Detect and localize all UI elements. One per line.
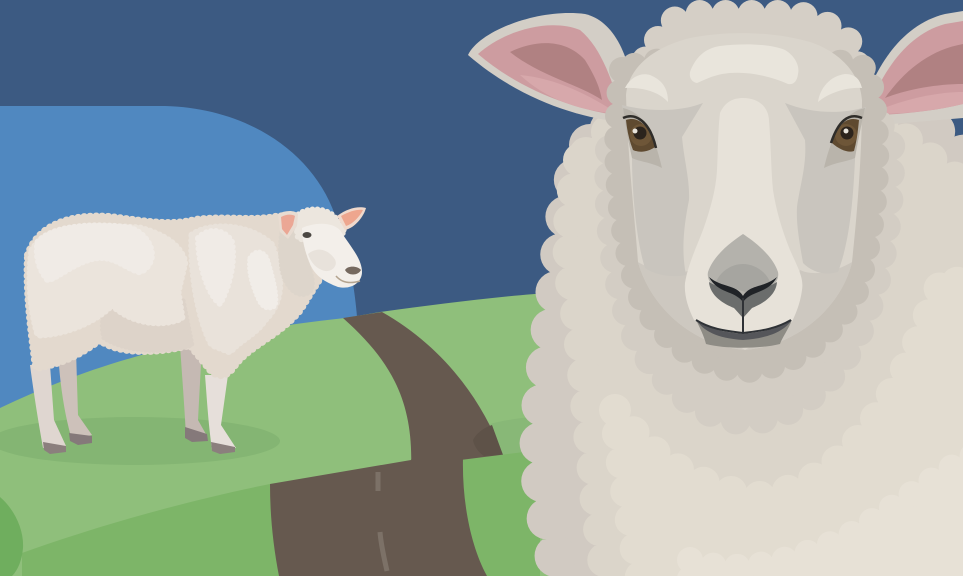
- small sheep: eye: [302, 232, 312, 238]
- large sheep: wide neck ruff: [609, 70, 890, 420]
- large sheep: [468, 11, 963, 576]
- large sheep: mouth line: [696, 298, 791, 333]
- large sheep: muzzle lobes: [696, 308, 790, 330]
- small sheep: fleece light layer: [30, 227, 185, 335]
- small sheep: belly shading: [102, 300, 192, 350]
- road: upper winding section: [343, 312, 503, 470]
- hill: back green slope: [0, 292, 560, 576]
- large sheep: top wool tuft: [640, 14, 858, 70]
- small sheep: [28, 207, 366, 454]
- large sheep: right brow highlight: [818, 74, 862, 102]
- small sheep: nose and mouth: [336, 267, 361, 283]
- large sheep: right ear: [858, 11, 963, 125]
- large sheep: nostril lines: [709, 277, 777, 302]
- small sheep: neck wool shade: [280, 228, 312, 295]
- small sheep: cheek shade: [308, 250, 336, 271]
- small sheep: far legs: [58, 345, 208, 445]
- large sheep: lip dark band: [696, 320, 792, 340]
- large sheep: left eye socket shade: [623, 108, 662, 168]
- large sheep: lower lip: [696, 320, 792, 348]
- road: lower wide section: [270, 458, 487, 576]
- large sheep: left eye: [623, 116, 656, 152]
- large sheep: mid fleece: [570, 120, 963, 576]
- small sheep: rump highlight: [37, 226, 151, 280]
- shadow: under small sheep: [0, 417, 280, 465]
- road: centre dashes: [378, 472, 387, 571]
- small sheep: face: [302, 224, 362, 288]
- large sheep: inner nose shade: [716, 264, 770, 292]
- large sheep: left brow highlight: [625, 74, 668, 102]
- large sheep: brightest chest fleece: [690, 450, 963, 576]
- large sheep: lower jaw shade: [638, 262, 852, 350]
- large sheep: outer fleece: [541, 100, 963, 576]
- small sheep: head wool: [295, 209, 345, 245]
- large sheep: under-nose dark band: [709, 282, 777, 318]
- small sheep: near ear: [278, 211, 298, 239]
- shadow: large sheep on road: [473, 425, 503, 456]
- hill: front green slope: [22, 450, 540, 576]
- large sheep: nose bridge and muzzle: [685, 98, 802, 332]
- large sheep: left ear: [468, 13, 634, 122]
- hill: dark green bush at lower left: [0, 497, 23, 576]
- small sheep: shoulder layer: [192, 227, 280, 352]
- large sheep: right eye socket shade: [824, 108, 865, 168]
- large sheep: face base: [626, 33, 862, 350]
- small sheep: fleece body: [28, 216, 325, 375]
- shadow: large sheep on back hill: [490, 416, 540, 458]
- small sheep: neck highlight: [249, 252, 276, 308]
- small sheep: near legs: [30, 365, 236, 454]
- large sheep: nose pad: [708, 234, 778, 304]
- large sheep: right eye: [831, 116, 862, 152]
- large sheep: forehead highlight: [690, 44, 798, 84]
- small sheep: shoulder highlight: [198, 231, 233, 304]
- large sheep: bright fleece: [615, 275, 963, 576]
- small sheep: far ear: [337, 207, 366, 230]
- large sheep: right cheek panel: [785, 103, 866, 274]
- large sheep: left cheek panel: [622, 103, 703, 276]
- background: light blue rounded panel: [0, 106, 358, 420]
- large sheep: dark collar around face: [617, 56, 876, 370]
